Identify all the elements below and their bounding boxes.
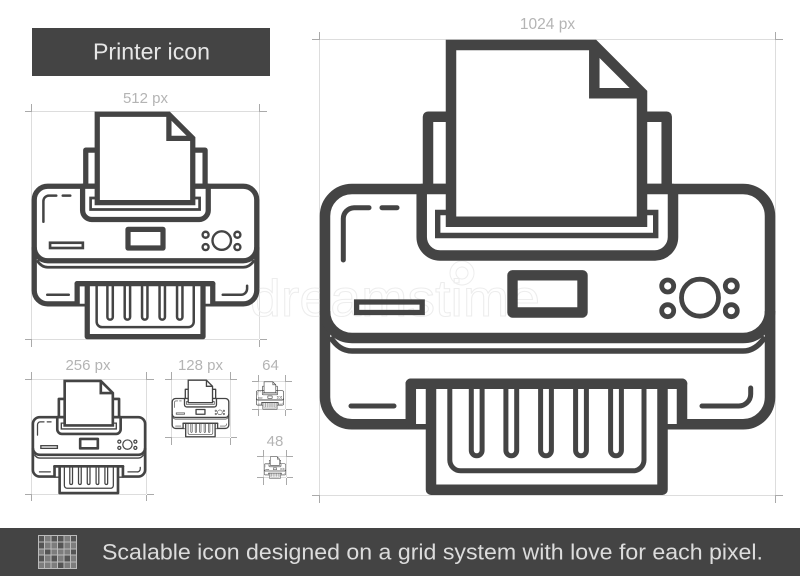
page top edge <box>411 378 682 389</box>
printer icon: 48 px <box>264 457 286 478</box>
tray inner strip <box>438 212 656 236</box>
paper tray recess <box>422 189 673 256</box>
label: 128 px: 128 px <box>178 357 224 374</box>
size frame: 48 <box>257 450 293 485</box>
printer icon: 256 px <box>33 381 145 493</box>
footer text: Scalable icon designed on a grid system with love for each pixel. <box>102 540 763 564</box>
output tray <box>411 384 682 424</box>
label: 512 px: 512 px <box>123 90 169 107</box>
control buttons <box>662 280 737 317</box>
page inner sheet <box>450 388 644 471</box>
label: 256 px: 256 px <box>65 357 111 374</box>
printer icon: 128 px <box>172 380 229 437</box>
label: 48: 48 <box>267 433 283 450</box>
size frame: 512 px <box>25 104 267 347</box>
title banner: Printer icon <box>93 38 210 64</box>
size frame: 64 <box>252 375 292 416</box>
highlight strokes top left <box>343 208 397 260</box>
printer icon: 512 px <box>34 114 257 337</box>
output fingers <box>471 388 621 456</box>
printer icon: 1024 px <box>325 45 770 490</box>
sheet of paper <box>451 45 642 222</box>
control dial <box>682 279 718 316</box>
printed page <box>431 384 662 490</box>
side accent lines <box>351 388 751 406</box>
watermark: dreamstime <box>250 270 540 328</box>
size frame: 256 px <box>25 372 154 501</box>
label: 1024 px: 1024 px <box>520 16 575 33</box>
card slot <box>357 302 422 312</box>
footer bar <box>0 528 800 576</box>
icon: pixel grid <box>38 535 77 569</box>
thin seam line <box>330 337 765 351</box>
size frame: 128 px <box>165 372 237 445</box>
label: 64: 64 <box>262 357 279 374</box>
printer icon: 64 px <box>256 382 284 409</box>
printer body outline <box>325 189 770 424</box>
paper corner fold <box>594 45 642 93</box>
display screen <box>512 275 582 312</box>
upper body lower edge <box>325 311 770 338</box>
paper tray back <box>428 117 667 189</box>
title banner <box>32 28 270 76</box>
size frame: 1024 px <box>312 32 783 503</box>
